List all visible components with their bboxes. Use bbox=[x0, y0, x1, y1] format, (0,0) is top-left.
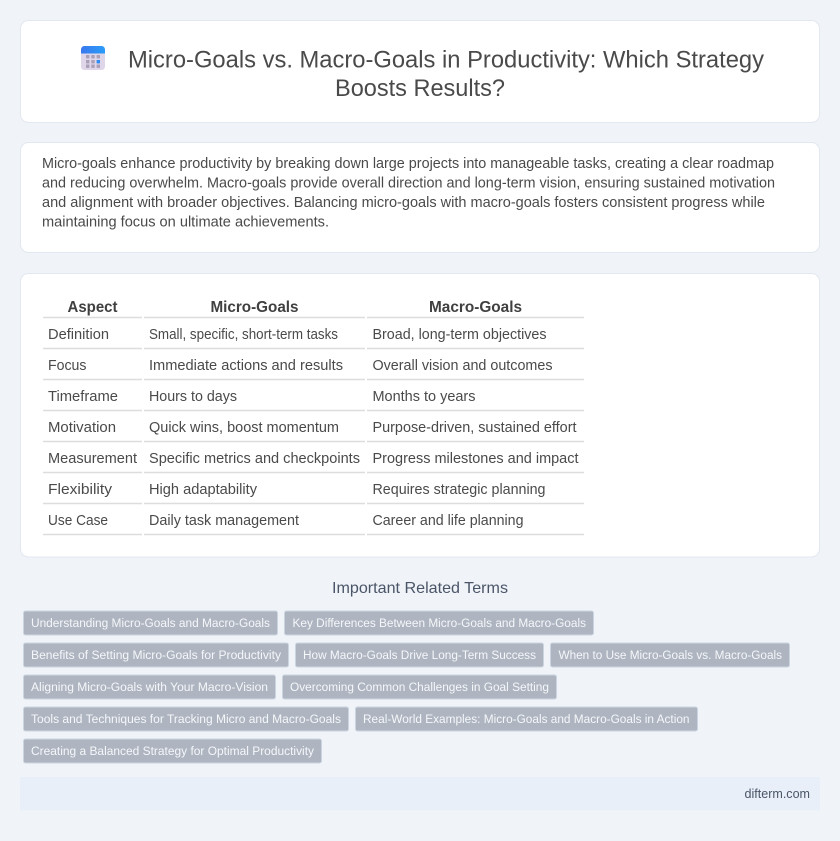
tag bbox=[24, 675, 276, 699]
tag bbox=[24, 707, 348, 731]
row: use case: Daily task management bbox=[149, 513, 299, 529]
row: measurement: Progress milestones and impact bbox=[372, 451, 578, 467]
tag: Tools and Techniques for Tracking Micro and Macro-Goals bbox=[31, 712, 341, 726]
row: definition: Small, specific, short-term tasks bbox=[149, 327, 338, 343]
row: use case: Career and life planning bbox=[372, 513, 524, 529]
row: definition: Broad, long-term objectives bbox=[372, 327, 546, 343]
row: timeframe: Months to years bbox=[372, 389, 476, 405]
row: motivation: Purpose-driven, sustained effort bbox=[372, 420, 577, 436]
icon: calendar bbox=[81, 46, 105, 70]
tag bbox=[284, 611, 594, 635]
description text: and reducing overwhelm. Macro-goals provide overall direction and long-term vision, ensuring sustained motivation bbox=[42, 176, 775, 192]
tag bbox=[356, 707, 698, 731]
row: timeframe: Timeframe bbox=[48, 389, 118, 405]
tag bbox=[550, 643, 790, 667]
row: focus bbox=[43, 358, 584, 380]
row: motivation: Quick wins, boost momentum bbox=[149, 420, 339, 436]
tag bbox=[24, 611, 278, 635]
tag: Aligning Micro-Goals with Your Macro-Vision bbox=[31, 680, 268, 694]
description text: and alignment with broader objectives. Balancing micro-goals with macro-goals fosters consistent progress while bbox=[42, 195, 765, 211]
tag bbox=[24, 643, 288, 667]
panel: title header bbox=[20, 20, 820, 122]
tag: Real-World Examples: Micro-Goals and Macro-Goals in Action bbox=[363, 712, 690, 726]
title bbox=[128, 46, 764, 102]
row: motivation: Motivation bbox=[48, 420, 116, 436]
tag bbox=[24, 739, 322, 763]
panel: comparison table bbox=[20, 274, 820, 557]
footer: difterm.com bbox=[744, 786, 810, 801]
heading: important related terms: Important Related Terms bbox=[332, 580, 508, 597]
description text bbox=[42, 156, 775, 230]
row: use case: Use Case bbox=[48, 513, 108, 529]
tag bbox=[296, 643, 544, 667]
row: timeframe bbox=[43, 389, 584, 410]
row: focus: Overall vision and outcomes bbox=[372, 358, 552, 374]
row: measurement: Specific metrics and checkpoints bbox=[149, 451, 360, 467]
table header row bbox=[43, 299, 584, 318]
tag: Overcoming Common Challenges in Goal Setting bbox=[290, 680, 549, 694]
tag: Key Differences Between Micro-Goals and Macro-Goals bbox=[292, 616, 586, 630]
table header row: Macro-Goals bbox=[429, 299, 522, 316]
row: flexibility: Flexibility bbox=[48, 482, 113, 498]
row: definition: Definition bbox=[48, 327, 109, 343]
row: use case bbox=[43, 513, 584, 534]
table header row: Micro-Goals bbox=[210, 299, 299, 316]
row: measurement bbox=[43, 451, 584, 472]
tag bbox=[282, 675, 556, 699]
panel: description bbox=[20, 142, 820, 252]
tag: Understanding Micro-Goals and Macro-Goals bbox=[31, 616, 270, 630]
row: flexibility: Requires strategic planning bbox=[372, 482, 546, 498]
row: measurement: Measurement bbox=[48, 451, 137, 467]
row: focus: Focus bbox=[48, 358, 86, 374]
table header row: Aspect bbox=[68, 299, 118, 316]
footer bbox=[20, 777, 820, 810]
tag: Benefits of Setting Micro-Goals for Productivity bbox=[31, 648, 282, 662]
row: timeframe: Hours to days bbox=[149, 389, 237, 405]
tag: When to Use Micro-Goals vs. Macro-Goals bbox=[558, 648, 782, 662]
description text: Micro-goals enhance productivity by breaking down large projects into manageable tasks, creating a clear roadmap bbox=[42, 156, 774, 172]
tag: Creating a Balanced Strategy for Optimal Productivity bbox=[31, 744, 315, 758]
row: flexibility: High adaptability bbox=[149, 482, 258, 498]
row: focus: Immediate actions and results bbox=[149, 358, 343, 374]
row: definition bbox=[43, 327, 584, 348]
title: Micro-Goals vs. Macro-Goals in Productivity: Which Strategy bbox=[128, 46, 764, 74]
tag list bbox=[24, 611, 790, 763]
tag: How Macro-Goals Drive Long-Term Success bbox=[303, 648, 536, 662]
title: Boosts Results? bbox=[335, 75, 505, 102]
row: motivation bbox=[43, 420, 584, 442]
description text: maintaining focus on ultimate achievements. bbox=[42, 214, 329, 230]
row: flexibility bbox=[43, 482, 584, 504]
